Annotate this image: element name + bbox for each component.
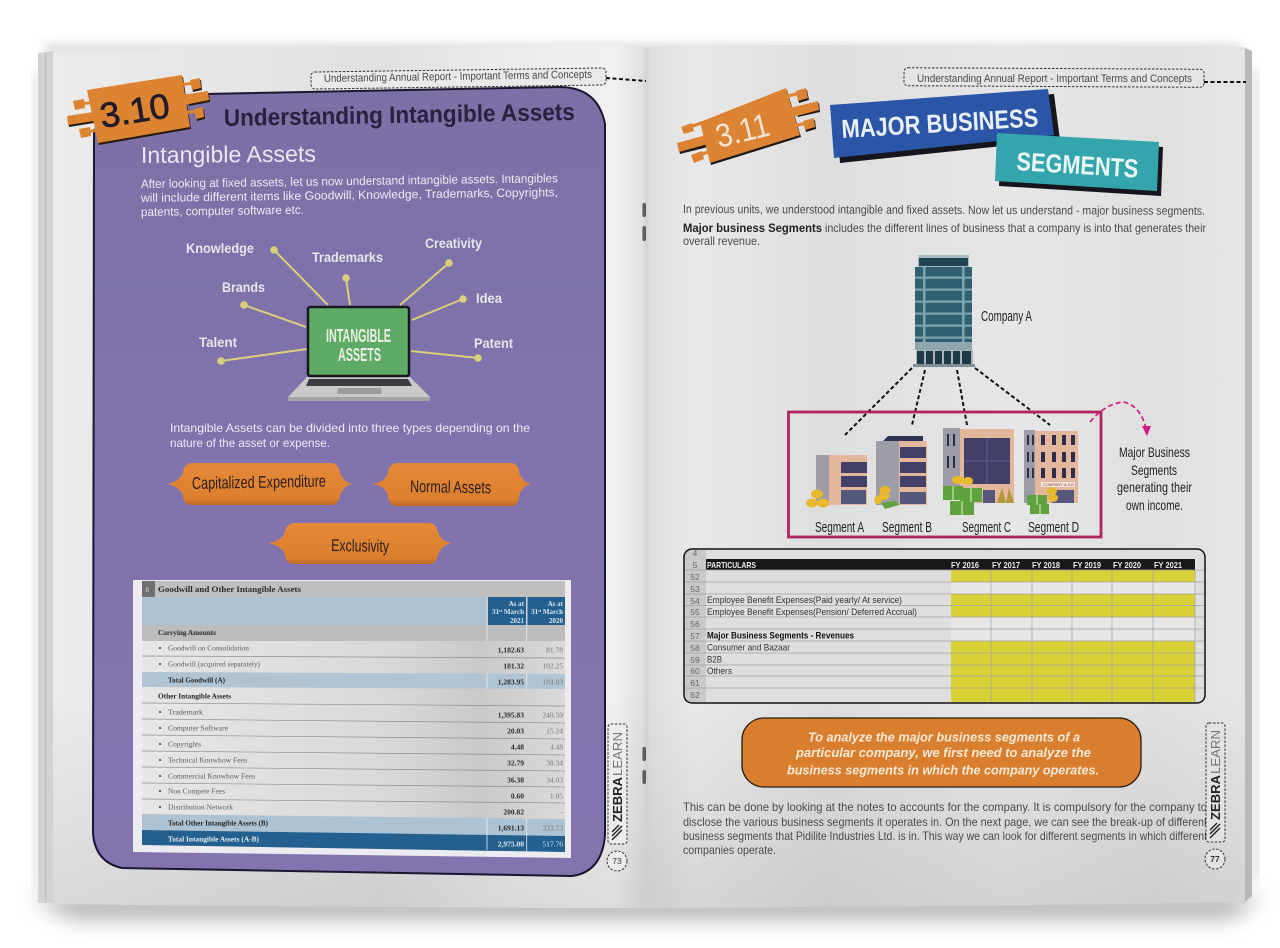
title banner: major business bbox=[830, 89, 1060, 163]
spoke labels: Patent bbox=[474, 335, 513, 351]
table: goodwill and other intangible assets: 38.34 bbox=[546, 758, 563, 768]
spreadsheet: particulars: 61 bbox=[690, 678, 700, 688]
arrow: to segments note bbox=[1090, 402, 1151, 436]
spoke labels: Idea bbox=[476, 290, 502, 306]
intro text right: includes the different lines of business that a company is into that generates their bbox=[825, 221, 1206, 235]
table: goodwill and other intangible assets: As at bbox=[509, 600, 525, 608]
button: exclusivity bbox=[268, 523, 451, 564]
table: goodwill and other intangible assets: 2021 bbox=[510, 617, 524, 625]
panel: business segments bbox=[788, 412, 1101, 537]
heading: intangible assets: Intangible Assets bbox=[141, 140, 316, 168]
title banner: segments bbox=[995, 133, 1163, 196]
spreadsheet: particulars: 59 bbox=[690, 655, 700, 665]
spreadsheet: particulars: 5 bbox=[693, 560, 698, 570]
right page bbox=[645, 45, 1245, 908]
button: normal assets bbox=[372, 463, 531, 506]
table: goodwill and other intangible assets: Trademark bbox=[168, 708, 203, 716]
table: goodwill and other intangible assets: 32.79 bbox=[507, 758, 524, 768]
building: segment a bbox=[806, 455, 867, 508]
table: goodwill and other intangible assets: 15.24 bbox=[546, 726, 563, 736]
table: goodwill and other intangible assets: As at bbox=[548, 600, 564, 608]
header tag left: Understanding Annual Report - Important Terms and Concepts bbox=[324, 69, 592, 85]
table: goodwill and other intangible assets: 36.38 bbox=[507, 776, 524, 784]
button: capitalized expenditure bbox=[166, 463, 352, 505]
table: goodwill and other intangible assets: 1,182.63 bbox=[498, 646, 524, 654]
badge 3.10 bbox=[67, 75, 210, 145]
spreadsheet: particulars: 54 bbox=[690, 596, 700, 606]
table: goodwill and other intangible assets: 2,975.08 bbox=[498, 840, 524, 848]
header tag right bbox=[904, 68, 1246, 87]
segment labels bbox=[815, 519, 1079, 536]
page number 73: 73 bbox=[612, 856, 622, 866]
callout: business segments in which the company operates. bbox=[787, 762, 1099, 778]
spreadsheet: particulars: FY 2018 bbox=[1032, 560, 1060, 570]
intro text right: overall revenue. bbox=[683, 234, 760, 248]
segment labels: Segment C bbox=[962, 519, 1011, 536]
spreadsheet: particulars: 62 bbox=[690, 690, 700, 700]
table: goodwill and other intangible assets: 184.03 bbox=[542, 678, 563, 686]
closing text right bbox=[683, 800, 1208, 857]
page number 77 bbox=[1205, 849, 1225, 869]
table: goodwill and other intangible assets: Goodwill on Consolidation bbox=[168, 644, 249, 652]
table: goodwill and other intangible assets: Computer Software bbox=[168, 724, 229, 732]
badge 3.11: 3.11 bbox=[712, 106, 773, 155]
table: goodwill and other intangible assets: Carrying Amounts bbox=[158, 628, 216, 637]
table: goodwill and other intangible assets: 333.73 bbox=[542, 824, 563, 832]
button: exclusivity: Exclusivity bbox=[331, 536, 390, 556]
page number 73 bbox=[607, 851, 627, 871]
intro text: will include different items like Goodwill, Knowledge, Trademarks, Copyrights, bbox=[140, 185, 558, 205]
types text: Intangible Assets can be divided into three types depending on the bbox=[170, 421, 530, 435]
spreadsheet: particulars: 52 bbox=[690, 572, 700, 582]
table: goodwill and other intangible assets: 1,395.83 bbox=[498, 710, 524, 720]
table: goodwill and other intangible assets: Total Other Intangible Assets (B) bbox=[168, 818, 268, 828]
table: goodwill and other intangible assets: 31ˢᵗ March bbox=[531, 608, 563, 616]
spreadsheet: particulars: 55 bbox=[690, 607, 700, 617]
types text: nature of the asset or expense. bbox=[170, 436, 330, 450]
intro text: patents, computer software etc. bbox=[141, 203, 304, 219]
note: major business segments: Major Business bbox=[1119, 444, 1190, 460]
table: goodwill and other intangible assets: 20.03 bbox=[507, 726, 524, 736]
brand tag right: LEARN bbox=[1208, 730, 1223, 774]
table: goodwill and other intangible assets: Distribution Network bbox=[168, 802, 233, 812]
icon: company tower bbox=[913, 255, 975, 367]
table: goodwill and other intangible assets: Total Intangible Assets (A-B) bbox=[168, 834, 259, 844]
table: goodwill and other intangible assets: Commercial Knowhow Fees bbox=[168, 772, 255, 780]
building: segment b bbox=[874, 436, 927, 509]
spreadsheet: particulars: Employee Benefit Expenses(Pension/ Deferred Accrual) bbox=[707, 607, 917, 618]
table: goodwill and other intangible assets: 0.60 bbox=[511, 792, 524, 800]
spreadsheet: particulars: FY 2016 bbox=[951, 560, 979, 570]
table: goodwill and other intangible assets: 31ˢᵗ March bbox=[492, 608, 524, 616]
title banner: segments: SEGMENTS bbox=[1016, 146, 1139, 184]
note: major business segments bbox=[1117, 444, 1192, 513]
intro text bbox=[140, 171, 558, 219]
table: goodwill and other intangible assets: 101.32 bbox=[503, 662, 524, 670]
dashed connectors bbox=[845, 368, 1050, 435]
table: goodwill and other intangible assets: Total Goodwill (A) bbox=[168, 676, 225, 684]
table: goodwill and other intangible assets: 4.48 bbox=[511, 742, 524, 752]
table: goodwill and other intangible assets: 102.25 bbox=[542, 662, 563, 670]
page number 77: 77 bbox=[1210, 854, 1220, 864]
intro text right: In previous units, we understood intangible and fixed assets. Now let us understand - major business segments. bbox=[683, 202, 1205, 218]
icon: laptop: ASSETS bbox=[338, 345, 381, 365]
spreadsheet: particulars: 4 bbox=[693, 548, 698, 558]
table: goodwill and other intangible assets: Non Compete Fees bbox=[168, 786, 225, 796]
note: major business segments: own income. bbox=[1126, 497, 1183, 513]
panel: understanding intangible assets bbox=[67, 68, 646, 876]
table: goodwill and other intangible assets: 8 bbox=[146, 586, 150, 594]
building: segment d: COMPANY & CO. bbox=[1043, 482, 1075, 487]
title: Understanding Intangible Assets bbox=[224, 99, 575, 132]
table: goodwill and other intangible assets: 1,283.95 bbox=[498, 678, 524, 686]
spreadsheet: particulars: 57 bbox=[690, 631, 700, 641]
intro text right bbox=[683, 202, 1206, 248]
types text bbox=[170, 421, 530, 450]
title banner: major business: MAJOR BUSINESS bbox=[841, 102, 1039, 144]
building: segment c bbox=[943, 428, 1014, 515]
note: major business segments: generating their bbox=[1117, 479, 1192, 495]
spoke labels: Creativity bbox=[425, 235, 482, 251]
label: company a: Company A bbox=[981, 308, 1032, 325]
brand tag left: ZEBRA bbox=[610, 776, 625, 822]
table: goodwill and other intangible assets bbox=[133, 580, 571, 858]
table: goodwill and other intangible assets: Technical Knowhow Fees bbox=[168, 756, 247, 764]
table: goodwill and other intangible assets: 517.76 bbox=[542, 840, 563, 848]
callout: particular company, we first need to analyze the bbox=[795, 745, 1091, 760]
brand tag left: LEARN bbox=[610, 732, 625, 776]
intro text: After looking at fixed assets, let us now understand intangible assets. Intangibles bbox=[141, 171, 558, 191]
spoke labels bbox=[186, 235, 513, 351]
closing text right: This can be done by looking at the notes to accounts for the company. It is compulsory for the company to bbox=[683, 800, 1207, 814]
spreadsheet: particulars: Others bbox=[707, 666, 732, 677]
table: goodwill and other intangible assets: 2020 bbox=[549, 617, 564, 625]
brand tag left bbox=[608, 724, 627, 844]
spreadsheet: particulars: 56 bbox=[690, 619, 700, 629]
header tag right: Understanding Annual Report - Important Terms and Concepts bbox=[917, 73, 1192, 85]
binding staples bbox=[642, 203, 646, 784]
spreadsheet: particulars: FY 2019 bbox=[1073, 560, 1101, 570]
spreadsheet: particulars: 58 bbox=[690, 643, 700, 653]
note: major business segments: Segments bbox=[1131, 462, 1177, 478]
badge 3.11 bbox=[677, 88, 820, 165]
spreadsheet: particulars: FY 2017 bbox=[992, 560, 1020, 570]
spreadsheet: particulars: B2B bbox=[707, 654, 722, 666]
spreadsheet: particulars bbox=[684, 548, 1205, 703]
brand tag right: ZEBRA bbox=[1208, 774, 1223, 820]
spreadsheet: particulars: Employee Benefit Expenses(Paid yearly/ At service) bbox=[707, 595, 902, 606]
table: goodwill and other intangible assets: Other Intangible Assets bbox=[158, 692, 231, 700]
table: goodwill and other intangible assets: Goodwill (acquired separately) bbox=[168, 660, 260, 668]
table: goodwill and other intangible assets: 200.82 bbox=[503, 808, 524, 816]
left page bbox=[53, 43, 646, 908]
intro text right: Major business Segments bbox=[683, 221, 822, 235]
table: goodwill and other intangible assets: 1.05 bbox=[550, 792, 563, 800]
spreadsheet: particulars: 53 bbox=[690, 584, 700, 594]
closing text right: disclose the various business segments it operates in. On the next page, we can see the break-up of different bbox=[683, 815, 1208, 829]
table: goodwill and other intangible assets: 81.78 bbox=[546, 646, 563, 654]
spokes bbox=[217, 246, 482, 365]
closing text right: business segments that Pidilite Industries Ltd. is in. This way we can look for different segments in which different bbox=[683, 829, 1208, 843]
spreadsheet: particulars: PARTICULARS bbox=[707, 560, 756, 570]
spoke labels: Brands bbox=[222, 279, 265, 295]
building: segment d bbox=[1024, 430, 1078, 514]
table: goodwill and other intangible assets: Goodwill and Other Intangible Assets bbox=[158, 585, 301, 594]
icon: laptop: INTANGIBLE bbox=[326, 326, 391, 346]
table: goodwill and other intangible assets: 34.03 bbox=[546, 776, 563, 784]
segment labels: Segment A bbox=[815, 519, 864, 536]
table: goodwill and other intangible assets: 240.59 bbox=[542, 710, 563, 720]
spreadsheet: particulars: FY 2021 bbox=[1154, 560, 1182, 570]
segment labels: Segment D bbox=[1028, 519, 1079, 536]
button: normal assets: Normal Assets bbox=[410, 477, 491, 497]
diagram: intangible assets laptop bbox=[186, 235, 513, 401]
brand tag right bbox=[1206, 723, 1225, 842]
table: goodwill and other intangible assets: 1,691.13 bbox=[498, 824, 524, 832]
spreadsheet: particulars: 60 bbox=[690, 666, 700, 676]
segment labels: Segment B bbox=[882, 519, 932, 536]
badge 3.10: 3.10 bbox=[97, 86, 172, 136]
icon: laptop bbox=[288, 307, 430, 401]
table: goodwill and other intangible assets: Copyrights bbox=[168, 740, 201, 748]
spreadsheet: particulars: FY 2020 bbox=[1113, 560, 1141, 570]
spreadsheet: particulars: Consumer and Bazaar bbox=[707, 642, 790, 654]
table: goodwill and other intangible assets: - bbox=[560, 808, 564, 816]
table: goodwill and other intangible assets: 4.48 bbox=[550, 742, 563, 752]
spoke labels: Knowledge bbox=[186, 240, 254, 256]
callout: To analyze the major business segments of a bbox=[808, 730, 1080, 744]
spreadsheet: particulars: Major Business Segments - Revenues bbox=[707, 630, 854, 642]
button: capitalized expenditure: Capitalized Expenditure bbox=[192, 472, 326, 493]
spoke labels: Talent bbox=[199, 334, 237, 350]
closing text right: companies operate. bbox=[683, 843, 776, 857]
spoke labels: Trademarks bbox=[312, 249, 383, 265]
callout bbox=[742, 718, 1141, 787]
